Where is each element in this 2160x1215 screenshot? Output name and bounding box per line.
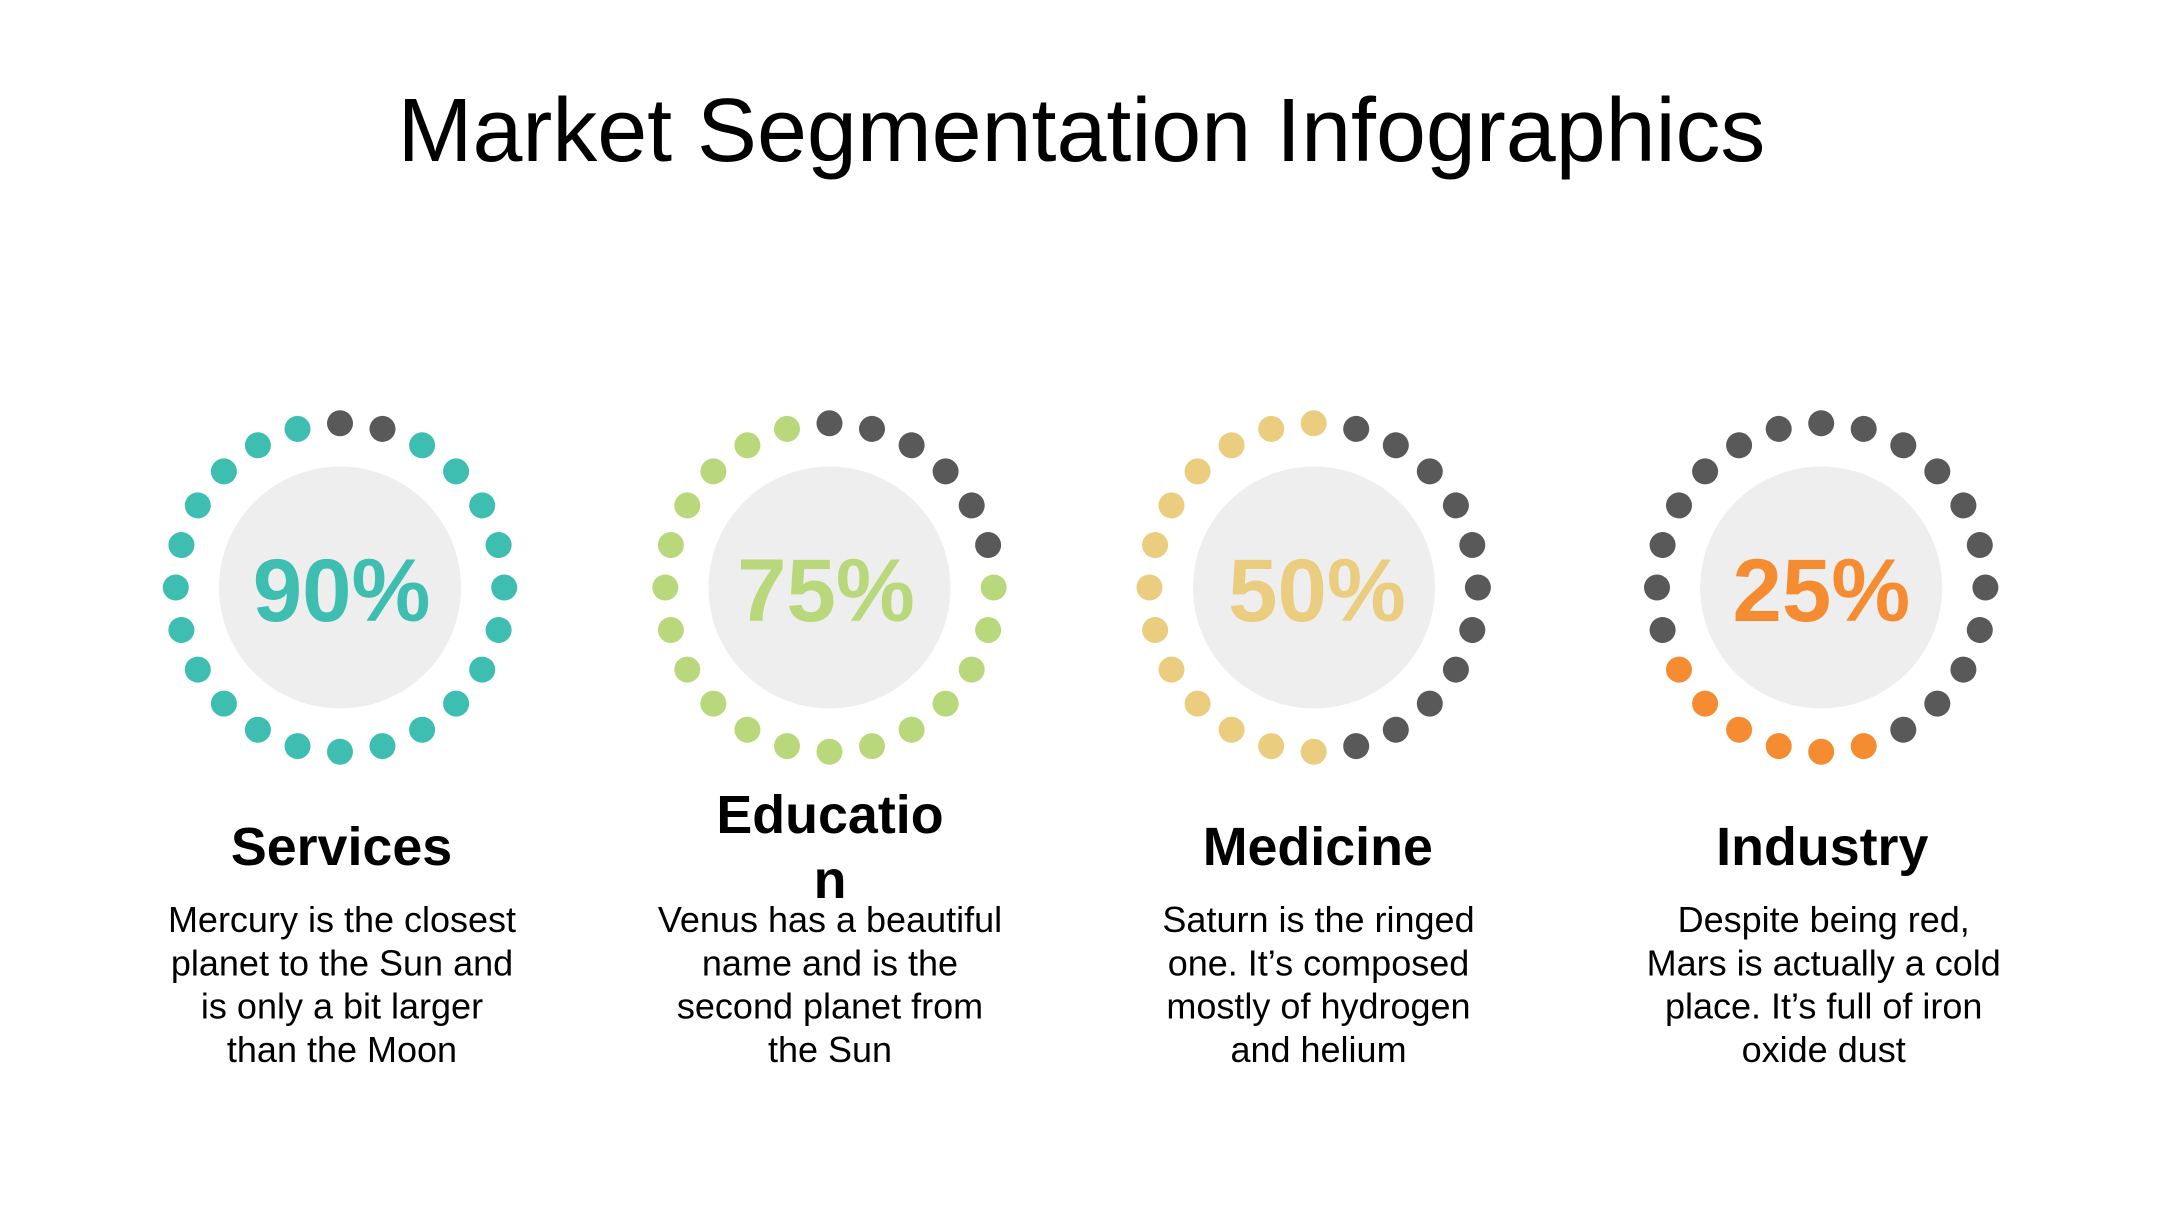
panel: education (652, 410, 1007, 1070)
description: the Sun (768, 1029, 892, 1070)
description: mostly of hydrogen (1166, 986, 1471, 1027)
dotted ring 50% (1136, 410, 1491, 765)
description: place. It’s full of iron (1665, 986, 1982, 1027)
description: second planet from (677, 986, 983, 1027)
description: planet to the Sun and (171, 942, 513, 983)
description: and helium (1230, 1029, 1407, 1070)
dotted ring 25% (1644, 410, 1998, 765)
description: Mercury is the closest (168, 899, 516, 940)
center disc (219, 466, 461, 708)
description: oxide dust (1742, 1029, 1906, 1070)
percent value: 75% (737, 541, 915, 640)
heading: Services (231, 817, 452, 877)
panel: industry (1644, 410, 2001, 1070)
description: Venus has a beautiful (658, 899, 1002, 940)
panel: services (163, 410, 517, 1070)
percent value: 25% (1733, 541, 1910, 640)
dotted ring 90% (163, 410, 517, 765)
title: Market Segmentation Infographics (398, 81, 1765, 181)
heading: n (814, 850, 846, 910)
dotted ring 75% (652, 410, 1007, 765)
heading: Educatio (716, 785, 944, 845)
description: is only a bit larger (201, 986, 483, 1027)
heading: Medicine (1203, 817, 1433, 877)
description: Saturn is the ringed (1162, 899, 1475, 940)
center disc (708, 466, 950, 708)
percent value: 50% (1228, 541, 1406, 640)
description: Mars is actually a cold (1647, 942, 2001, 983)
center disc (1700, 466, 1942, 708)
description: Despite being red, (1678, 899, 1970, 940)
heading: Industry (1716, 817, 1928, 877)
description: than the Moon (227, 1029, 457, 1070)
description: name and is the (702, 942, 958, 983)
panel: medicine (1136, 410, 1491, 1070)
description: one. It’s composed (1168, 942, 1469, 983)
percent value: 90% (253, 541, 430, 640)
center disc (1193, 466, 1435, 708)
